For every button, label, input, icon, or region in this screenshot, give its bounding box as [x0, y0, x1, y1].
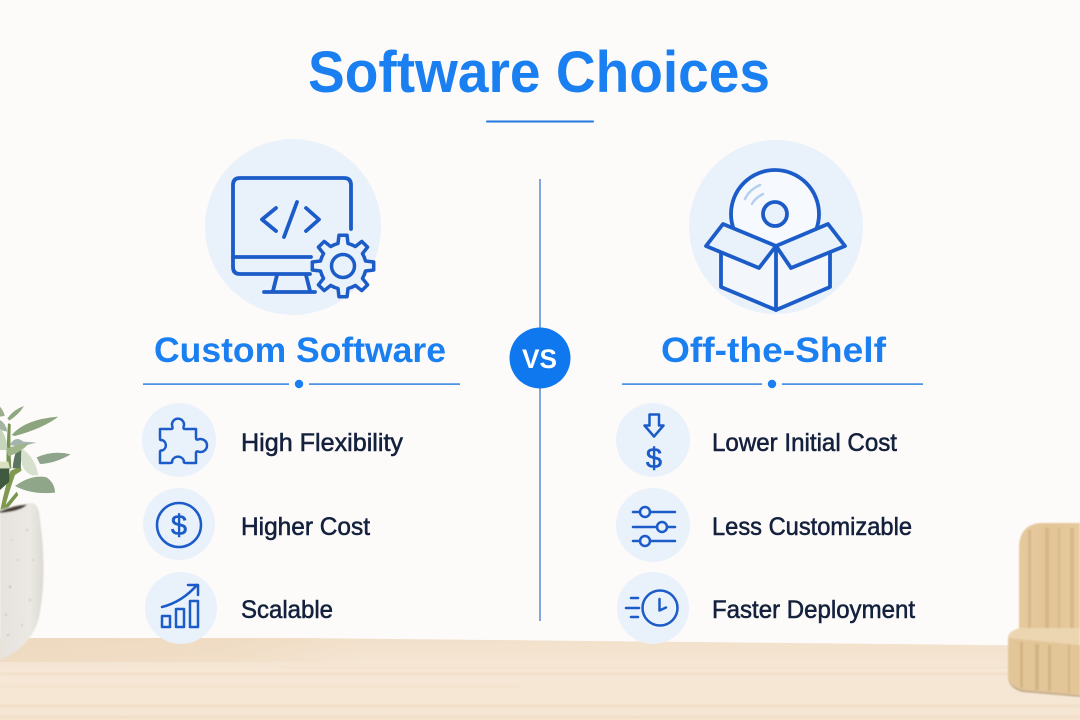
item label: Higher Cost [241, 513, 370, 541]
item: high flexibility [142, 403, 403, 477]
item: faster deployment [617, 572, 915, 644]
center divider with VS badge [510, 179, 570, 621]
item: higher cost: $ [171, 510, 187, 542]
title underline [486, 120, 594, 122]
item label: Faster Deployment [712, 596, 915, 624]
heading divider [143, 380, 460, 388]
item: scalable [145, 572, 333, 644]
wooden table [0, 638, 1080, 720]
item label: Lower Initial Cost [712, 429, 897, 457]
item label: Scalable [241, 596, 333, 624]
item label: Less Customizable [712, 513, 912, 541]
heading: off-the-shelf: Off-the-Shelf [661, 331, 886, 370]
heading divider [622, 380, 923, 388]
panel: off-the-shelf [616, 140, 923, 644]
item: less customizable [616, 488, 912, 562]
panel: custom software [142, 139, 460, 644]
item: higher cost [143, 488, 370, 560]
item: lower initial cost: $ [646, 443, 662, 475]
item label: High Flexibility [241, 429, 403, 457]
title: Software Choices [308, 40, 770, 105]
icon: disc in box [689, 140, 863, 314]
icon: monitor with gear [205, 139, 381, 315]
heading: custom software: Custom Software [154, 331, 446, 370]
ceramic pot [0, 503, 44, 660]
wooden block [1008, 523, 1080, 697]
center divider with VS badge: VS [522, 344, 557, 374]
plant [0, 406, 71, 512]
item: lower initial cost [616, 403, 897, 477]
